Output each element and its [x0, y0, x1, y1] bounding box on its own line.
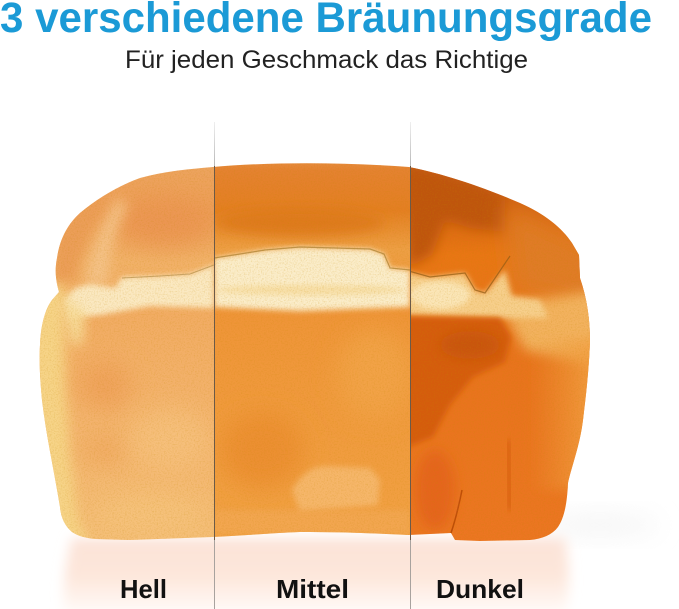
crumb texture: [30, 155, 600, 550]
label: dunkel: Dunkel: [436, 574, 524, 604]
dark top crust: [411, 167, 510, 269]
cream band: [405, 270, 548, 318]
reflection under the loaf: [64, 538, 569, 609]
dark pocket: [405, 317, 511, 448]
label: hell: Hell: [120, 574, 167, 604]
ground shadow: [540, 513, 660, 537]
section: dunkel: [411, 167, 590, 541]
subtitle: Für jeden Geschmack das Richtige: [125, 46, 528, 74]
section: mittel: [210, 155, 415, 550]
crease: [451, 490, 462, 533]
right crust: [505, 205, 600, 310]
bread loaf: [30, 155, 605, 550]
divider lines: [214, 122, 411, 609]
section: hell: [40, 166, 214, 540]
label: mittel: Mittel: [276, 574, 349, 604]
golden right flank: [503, 286, 590, 362]
